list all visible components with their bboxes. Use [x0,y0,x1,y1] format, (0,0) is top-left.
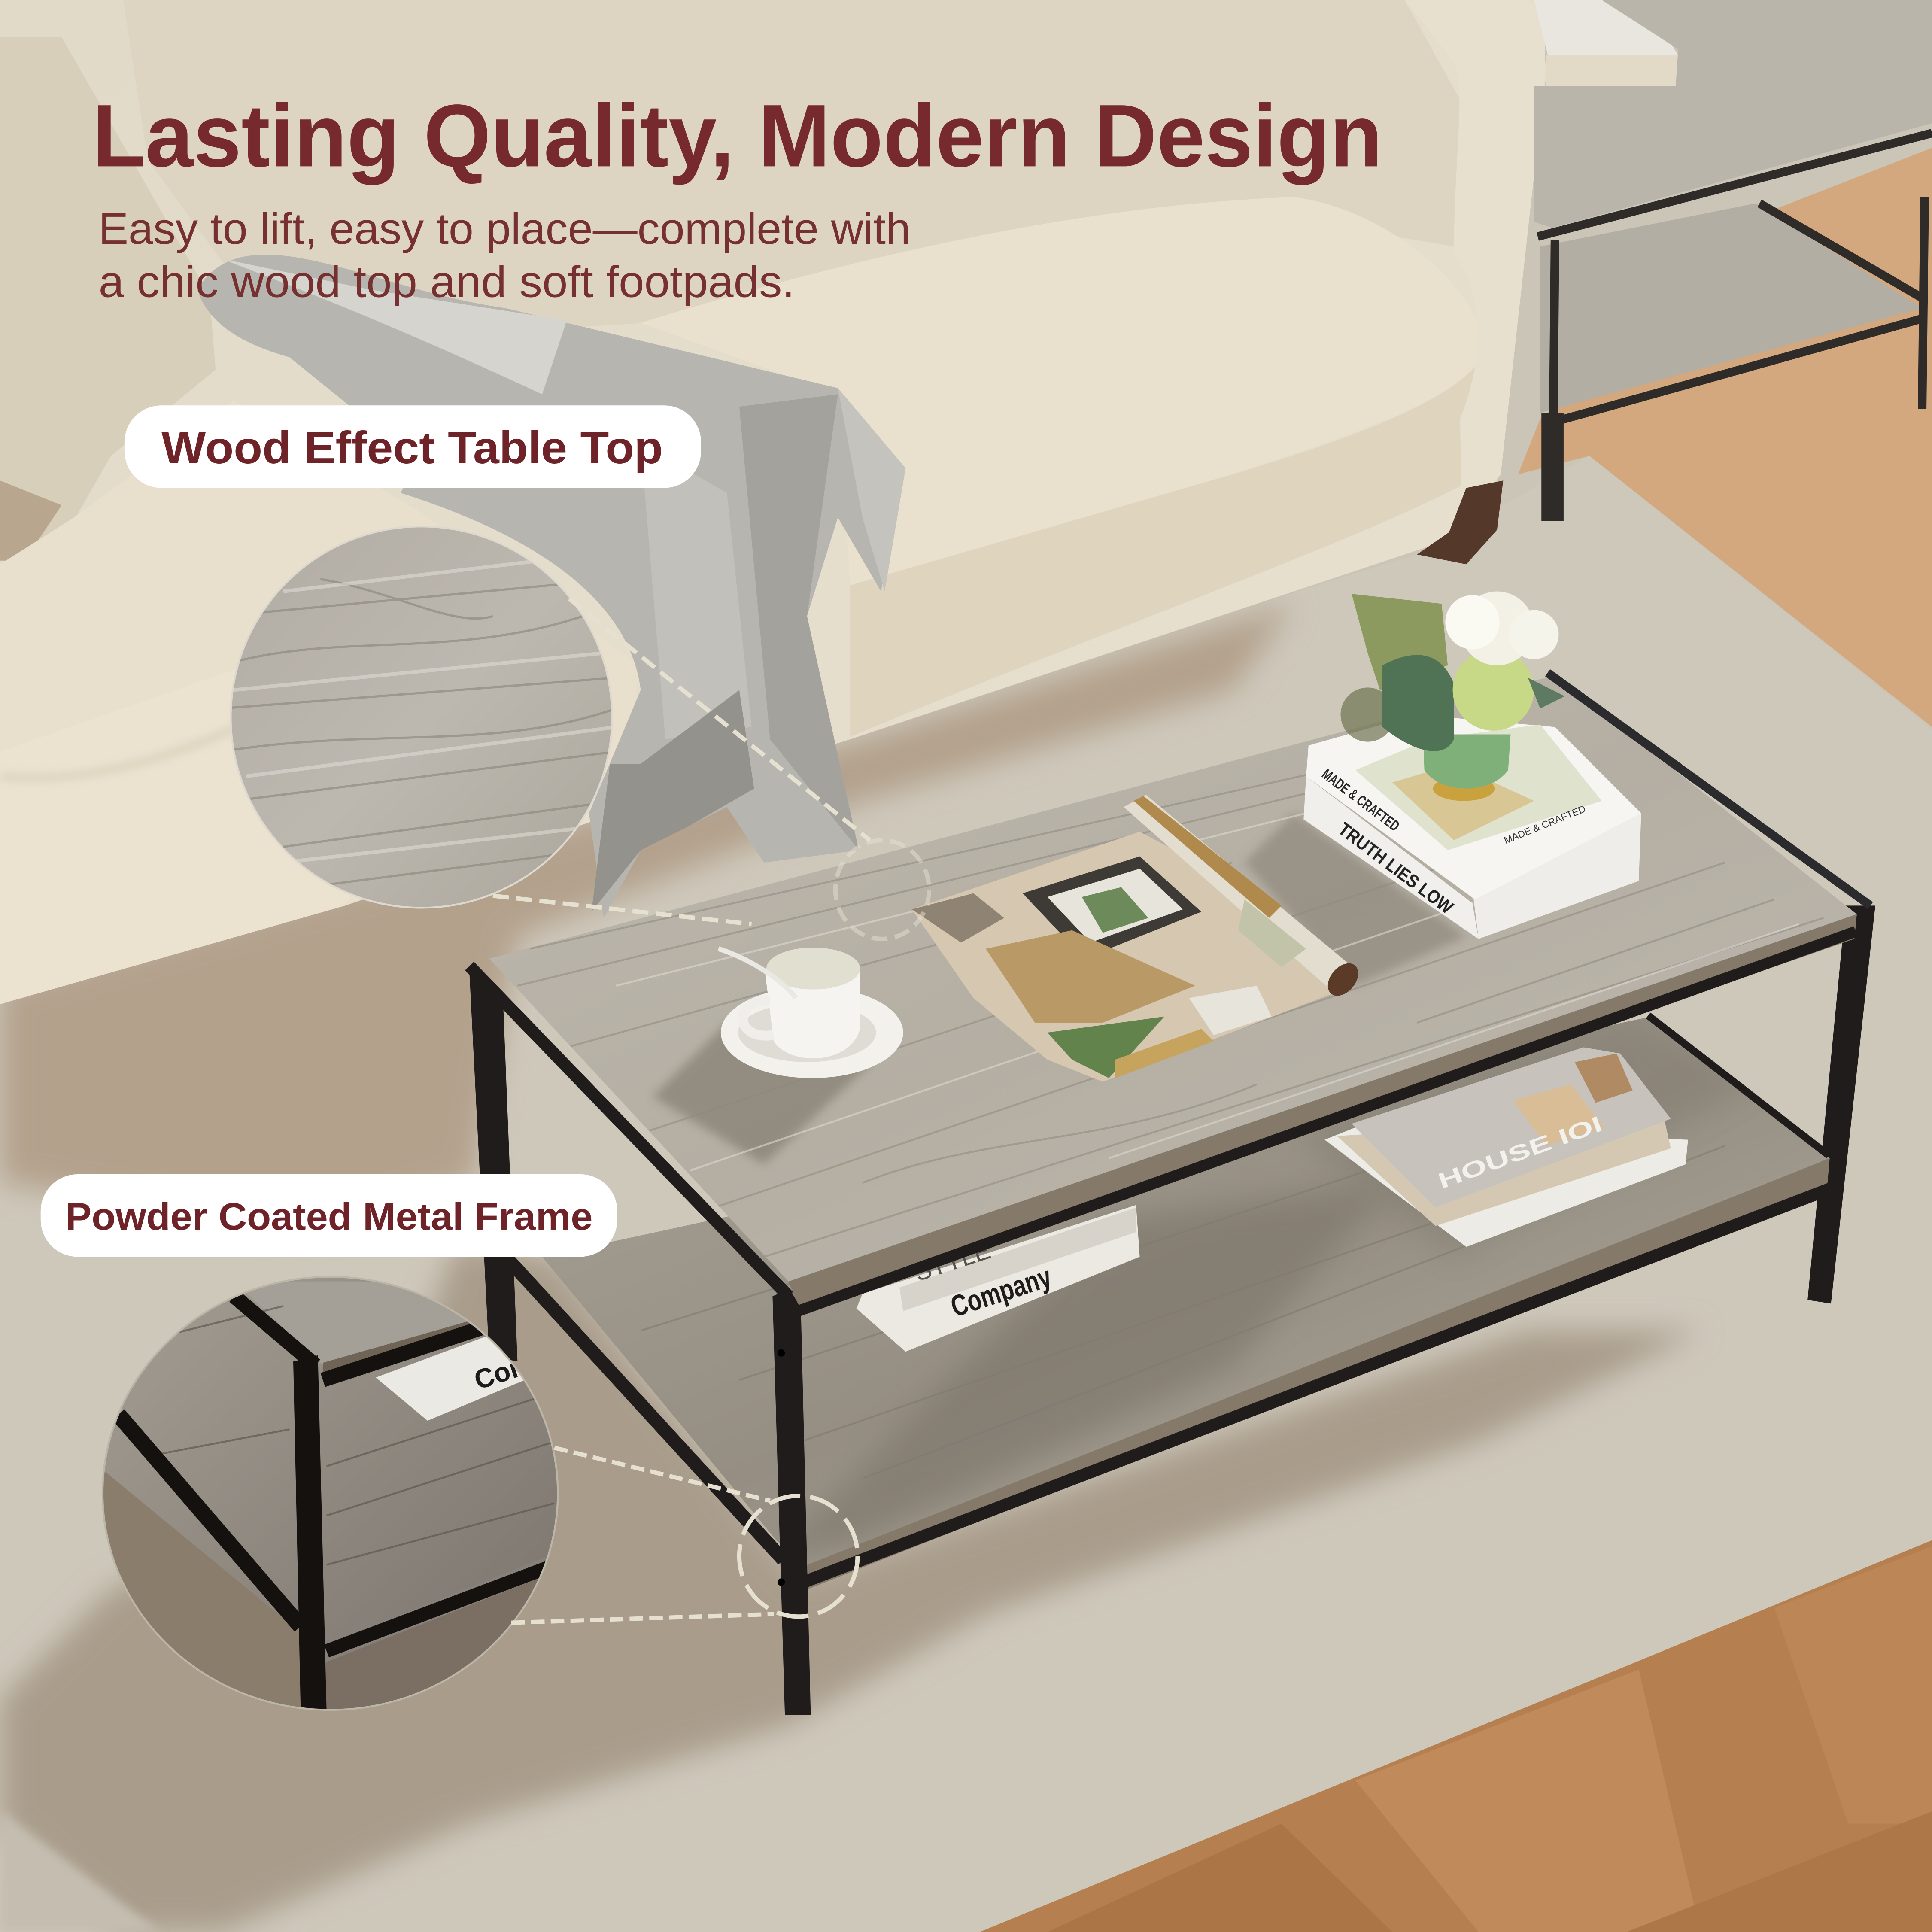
subtitle [99,204,911,307]
sofa cushion front [850,357,1482,737]
sofa foot [1417,480,1503,564]
floor: upper right wood [1518,148,1932,727]
sofa arm [1405,0,1545,488]
open magazine [912,795,1364,1082]
inset: metal frame close up: Con [471,1351,530,1396]
books and flowers on table [1303,592,1641,939]
callout lines: frame detail [511,1448,857,1623]
magazines stack: HOUSE IOI [1435,1111,1605,1194]
lower shelf books [857,1047,1688,1352]
book: Company: Company [947,1260,1055,1323]
book stack: TRUTH LIES LOW [1334,819,1457,918]
book stack [1303,715,1641,939]
table top [489,675,1857,1306]
label: wood effect table top [125,405,701,488]
throw blanket [197,255,905,918]
magazine roll [1124,795,1353,993]
rear legs [469,905,1875,1361]
sofa left seat [0,401,641,1004]
magazines stack [1324,1047,1688,1247]
coffee table [469,673,1875,1715]
sofa seat cushion [641,197,1485,585]
sofa back upper [123,0,1466,345]
side table books [1534,0,1678,123]
rug shadow from table [0,1245,1700,1932]
subtitle: Easy to lift, easy to place—complete with [99,204,911,253]
lower shelf [542,1010,1830,1589]
upper frame [469,673,1871,1311]
lower frame rails [511,1018,1826,1581]
front leg [772,1289,811,1715]
rug [0,456,1932,1932]
bouquet [1340,592,1565,751]
inset frame [118,1296,548,1651]
inset: metal frame close up [99,1269,567,1725]
sofa [0,0,1546,1004]
side table top right [1534,0,1932,521]
callout lines: wood detail [493,599,929,939]
label: powder coated metal frame [41,1174,617,1257]
side table lower shelf [1540,204,1922,413]
cup and saucer [718,948,903,1078]
inset book [376,1324,525,1421]
table top shadow of objects [653,1023,875,1164]
floor: lower right parquet [980,1540,1932,1932]
sofa left pillow [0,37,216,561]
book stack: MADE & CRAFTED [1502,803,1587,846]
label: powder coated metal frame: Powder Coated Metal Frame [65,1195,592,1238]
vase [1423,734,1510,801]
label: wood effect table top: Wood Effect Table Top [161,422,663,473]
side table frame [1538,133,1932,517]
title: Lasting Quality, Modern Design [92,86,1382,185]
subtitle: a chic wood top and soft footpads. [99,257,795,307]
inset: wood effect close up [222,517,629,924]
book: Company: STYLE [911,1236,994,1287]
book: Company [857,1205,1140,1352]
book stack: MADE & CRAFTED [1319,766,1402,835]
side table top surface [1534,0,1932,228]
rug shadow from sofa [0,604,1294,1232]
